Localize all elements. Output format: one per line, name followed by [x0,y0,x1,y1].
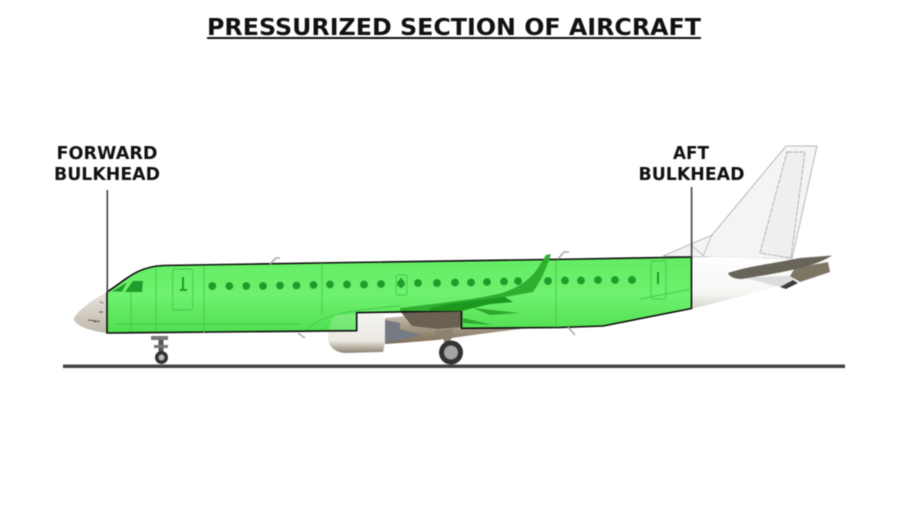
pylon [400,311,462,329]
title: PRESSURIZED SECTION OF AIRCRAFT [207,15,701,41]
antennas [270,252,575,338]
stabilizer shadow [745,275,800,287]
horizontal stabilizer [728,256,832,279]
tail cone and APU [790,262,830,282]
pressurized section [107,257,692,333]
label: forward bulkhead: BULKHEAD [54,165,160,185]
label: forward bulkhead [54,144,160,292]
aircraft [74,146,832,364]
lower fairing [385,311,527,344]
main landing gear [435,329,463,364]
doors and panel lines [115,260,691,333]
label: aft bulkhead [638,144,744,257]
nose cone [74,292,107,333]
cockpit windows [112,281,143,292]
label: aft bulkhead: AFT [673,144,709,164]
label: aft bulkhead: BULKHEAD [638,165,744,185]
nose landing gear [151,336,168,364]
passenger windows [208,276,636,290]
wing [400,254,551,325]
engine inlet seen through green [329,314,356,330]
tail fin [663,146,817,259]
nacelle [328,314,385,353]
ground line [63,364,845,368]
rear fuselage [691,257,830,309]
core exhaust [385,320,422,343]
engine [328,311,527,353]
label: forward bulkhead: FORWARD [56,144,158,164]
